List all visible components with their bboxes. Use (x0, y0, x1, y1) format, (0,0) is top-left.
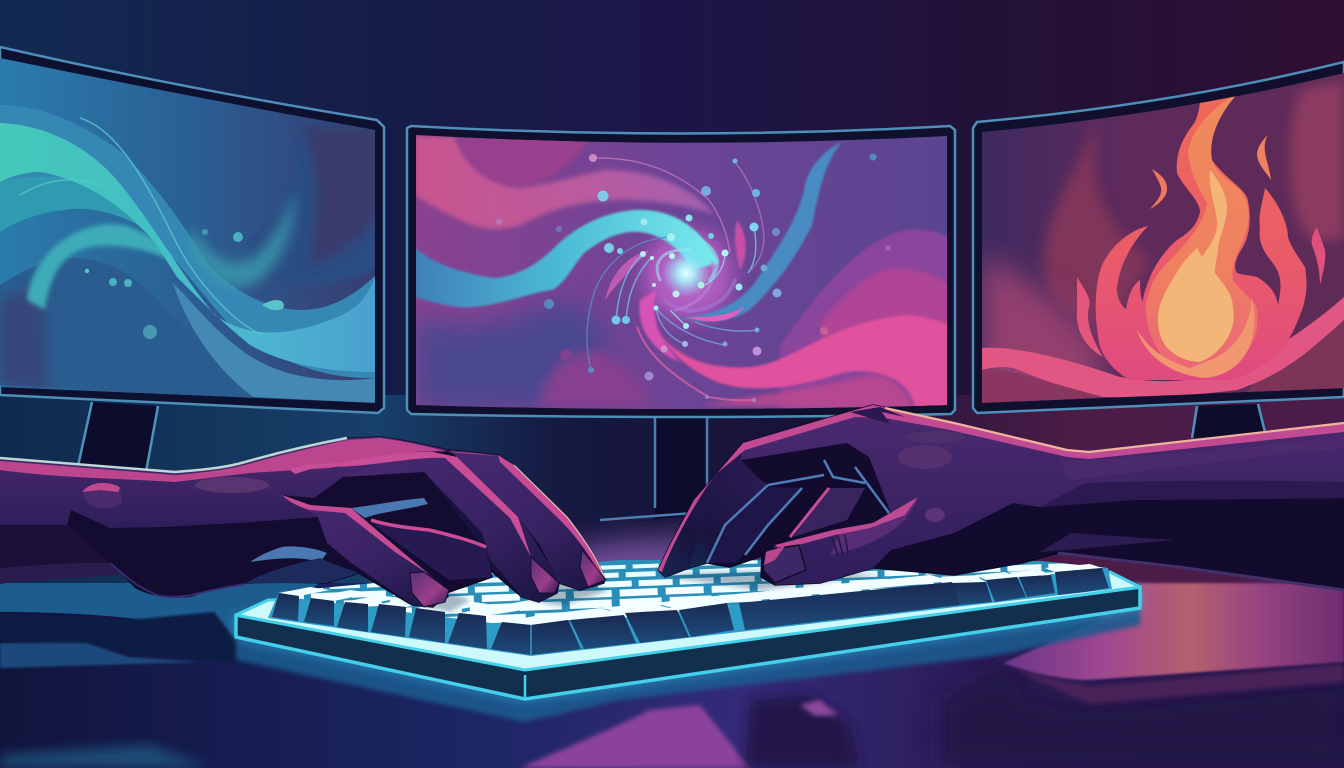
keyboard reflection glow on desk (236, 608, 1140, 722)
left hand silhouette (0, 437, 604, 607)
flame left licks (1077, 277, 1103, 357)
right hand back and arm (741, 405, 1344, 585)
right fourth finger (793, 488, 865, 537)
left screen teal swirl artwork (0, 50, 380, 410)
left far finger (449, 450, 604, 590)
keyboard top plate (236, 572, 1140, 670)
left fingernails (410, 572, 449, 607)
key tops in rows (279, 560, 1108, 624)
right finger blue edges (707, 460, 889, 563)
panel: right monitor (973, 60, 1344, 413)
right screen flame artwork (975, 60, 1344, 405)
panel: left monitor (0, 47, 384, 413)
right hand and forearm (658, 405, 1344, 590)
flame crescents (1137, 298, 1254, 378)
right third finger (707, 487, 802, 563)
left hand back (0, 437, 449, 528)
front row key tops (279, 564, 1102, 625)
keyboard outer glow (236, 587, 1140, 699)
flame core (1158, 170, 1234, 362)
center monitor stand (600, 414, 707, 522)
glowing keyboard (236, 547, 1140, 722)
left hand highlight (195, 477, 269, 493)
left arm magenta rim (0, 438, 498, 482)
left wrist knob (82, 483, 122, 508)
left finger magenta rims (290, 452, 531, 557)
right lower arm band (1040, 533, 1174, 552)
right monitor stand (1192, 404, 1266, 438)
left front finger (282, 495, 449, 607)
left hand and forearm (0, 437, 606, 607)
right hand magenta rims (658, 405, 1344, 572)
left monitor stand (78, 402, 158, 472)
flame orange layer (1146, 93, 1258, 372)
right hand highlights (898, 445, 952, 469)
left rear small finger (371, 522, 492, 580)
fingertip glow on keys (400, 570, 880, 612)
left index finger (343, 452, 559, 602)
keyboard side panels (236, 587, 1140, 699)
right thumb nail (763, 545, 806, 583)
right hand silhouette (658, 405, 1344, 590)
blue finger shadows (250, 498, 428, 562)
left arm lower band (0, 525, 110, 578)
right second finger (689, 477, 768, 568)
flame main body (1125, 93, 1307, 380)
panel: center monitor (407, 125, 955, 417)
right far finger (658, 443, 757, 577)
keyboard deck under keys (268, 560, 1112, 656)
center screen galaxy swirl artwork (410, 125, 955, 415)
right thumb shading (830, 500, 918, 555)
front row key fronts (272, 568, 1109, 655)
